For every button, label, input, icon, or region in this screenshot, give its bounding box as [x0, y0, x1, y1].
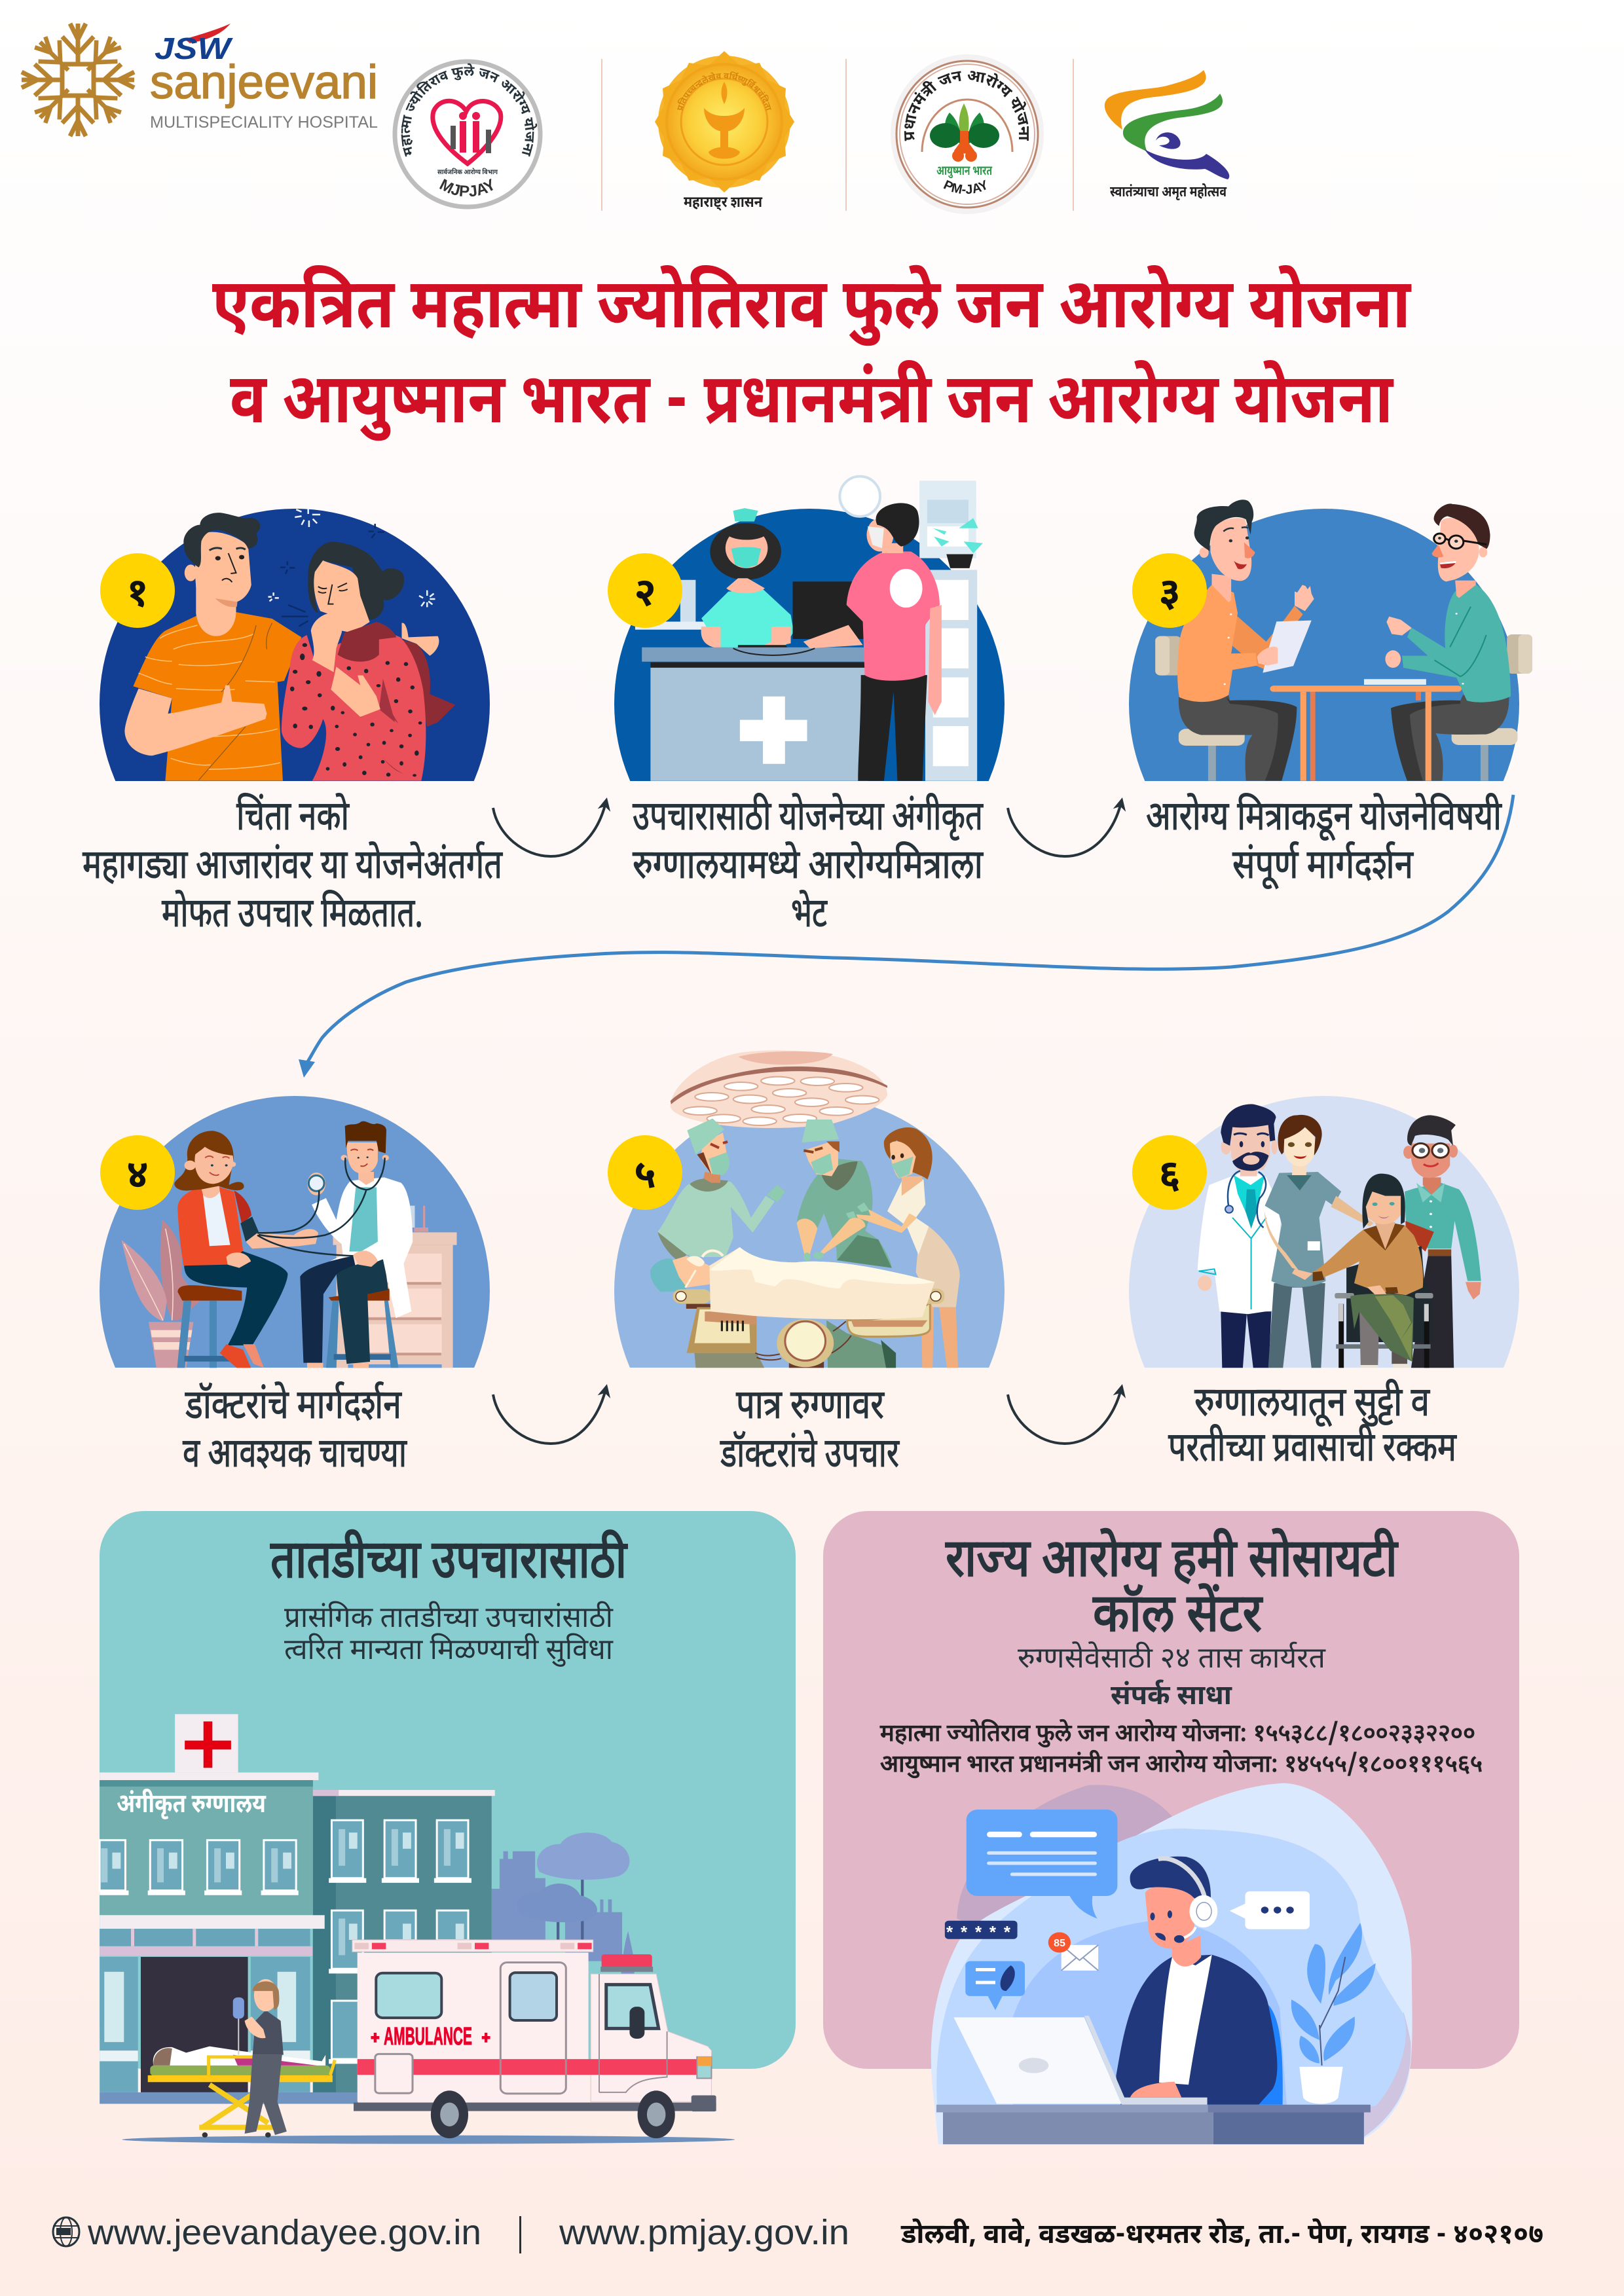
step 1 text: चिंता नको — [236, 793, 350, 847]
title line 1: एकत्रित महात्मा ज्योतिराव फुले जन आरोग्य योजना — [212, 264, 1412, 356]
badge 1 — [100, 553, 175, 628]
badge 4 — [100, 1135, 175, 1210]
arrow: step 5 to 6 — [1008, 1387, 1122, 1444]
badge 1: १ — [126, 571, 149, 622]
arrow: step 2 to 3 — [1008, 800, 1122, 856]
password label: ***** — [946, 1922, 1011, 1942]
panel heading: कॉल सेंटर — [1093, 1584, 1263, 1652]
badge 3 — [1132, 553, 1207, 628]
arrow: step 1 to 2 — [493, 800, 606, 856]
step 4 text — [183, 1381, 407, 1484]
logo: MJPJAY: महात्मा ज्योतिराव फुले जन आरोग्य योजना — [401, 63, 537, 157]
step 3 text: आरोग्य मित्राकडून योजनेविषयी — [1146, 793, 1502, 847]
step 6: discharge illustration — [1129, 1096, 1519, 1368]
footer divider — [519, 2216, 521, 2253]
logo: Maharashtra seal — [655, 51, 794, 192]
24 hour service line: रुग्णसेवेसाठी २४ तास कार्यरत — [1018, 1641, 1326, 1679]
panel: call center — [823, 1511, 1519, 2144]
badge 6 — [1132, 1135, 1207, 1210]
call center agent illustration — [931, 1783, 1412, 2144]
hospital and ambulance illustration — [100, 1714, 735, 2144]
step 2 text — [633, 793, 984, 943]
step 4 text: डॉक्टरांचे मार्गदर्शन — [185, 1381, 402, 1435]
badge 2: २ — [634, 571, 656, 622]
logo: MJPJAY: MJPJAY — [439, 178, 493, 196]
badge 3: ३ — [1158, 571, 1181, 622]
step 2 text: भेट — [791, 890, 828, 943]
panel background pink — [823, 1511, 1519, 2069]
step 1 text — [83, 793, 503, 943]
panel heading — [946, 1529, 1398, 1652]
header logos — [21, 22, 1230, 214]
step 6 text: परतीच्या प्रवासाची रक्कम — [1168, 1424, 1457, 1478]
badge 2 — [608, 553, 682, 628]
panel description: त्वरित मान्यता मिळण्याची सुविधा — [284, 1633, 614, 1671]
logo: Azadi ka Amrit Mahotsav flame — [1105, 70, 1229, 179]
badge 5 — [608, 1135, 682, 1210]
panel: emergency treatment — [100, 1511, 796, 2144]
icon: globe — [53, 2217, 79, 2246]
step 2 text: उपचारासाठी योजनेच्या अंगीकृत — [633, 793, 984, 847]
step 1: illness illustration — [100, 508, 490, 781]
badge 5: ५ — [634, 1153, 656, 1204]
website 1: www.jeevandayee.gov.in — [87, 2213, 481, 2252]
notification count: 85 — [1054, 1938, 1065, 1949]
logo: MJPJAY — [393, 59, 542, 210]
logo: hospital tagline: MULTISPECIALITY HOSPITAL — [150, 113, 378, 132]
step 6 text — [1168, 1379, 1457, 1478]
logo: PM-JAY: प्रधानमंत्री जन आरोग्य योजना — [904, 71, 1029, 141]
badge 6: ६ — [1158, 1153, 1181, 1204]
helpline numbers: महात्मा ज्योतिराव फुले जन आरोग्य योजना: १५५३८८/१८००२३३२२०० — [880, 1719, 1475, 1751]
logo: PM-JAY — [891, 54, 1044, 214]
step 1 text: मोफत उपचार मिळतात. — [162, 890, 423, 943]
panel description — [284, 1601, 614, 1671]
arrow: long connector step 3 to 4 — [299, 795, 1513, 1078]
panel heading: तातडीच्या उपचारासाठी — [270, 1530, 627, 1599]
step 4: doctor consultation illustration — [100, 1096, 490, 1368]
step 2: reception illustration — [614, 475, 1005, 781]
arrow: step 4 to 5 — [493, 1387, 606, 1444]
logo: PM-JAY: PM-JAY — [943, 179, 986, 194]
panel heading: राज्य आरोग्य हमी सोसायटी — [946, 1529, 1398, 1597]
logo caption: Amrit Mahotsav: स्वातंत्र्याचा अमृत महोत्सव — [1110, 183, 1227, 202]
helpline numbers — [880, 1719, 1483, 1781]
title line 2: व आयुष्मान भारत - प्रधानमंत्री जन आरोग्य योजना — [230, 360, 1394, 451]
address: डोलवी, वावे, वडखळ-धरमतर रोड, ता.- पेण, रायगड - ४०२१०७ — [900, 2218, 1543, 2255]
hospital sign: अंगीकृत रुग्णालय — [117, 1789, 266, 1823]
logo: JSW wordmark — [155, 24, 233, 65]
footer — [53, 2213, 1543, 2255]
logo: Maharashtra seal: प्रतिपच्चन्द्रलेखेव वर्धिष्णुर्विश्ववंदिता — [677, 71, 771, 111]
panel description: प्रासंगिक तातडीच्या उपचारांसाठी — [284, 1601, 614, 1639]
website 2: www.pmjay.gov.in — [559, 2213, 849, 2252]
step 5 text: पात्र रुग्णावर — [736, 1382, 885, 1435]
helpline numbers: आयुष्मान भारत प्रधानमंत्री जन आरोग्य योजना: १४५५५/१८००१११५६५ — [880, 1750, 1483, 1781]
logo: MJPJAY: सार्वजनिक आरोग्य विभाग — [437, 168, 498, 177]
title — [212, 264, 1412, 451]
ambulance label: AMBULANCE — [384, 2023, 472, 2050]
step 5 text: डॉक्टरांचे उपचार — [720, 1430, 900, 1484]
step 3 text — [1146, 793, 1502, 895]
contact heading: संपर्क साधा — [1111, 1679, 1232, 1716]
step 3: guidance illustration — [1129, 500, 1532, 781]
step 1 text: महागड्या आजारांवर या योजनेअंतर्गत — [83, 841, 503, 895]
panel background teal — [100, 1511, 796, 2069]
badge 4: ४ — [126, 1153, 149, 1204]
logo: sanjeevani wordmark: sanjeevani — [150, 56, 378, 109]
step 4 text: व आवश्यक चाचण्या — [183, 1430, 407, 1484]
logo caption: Maharashtra government: महाराष्ट्र शासन — [684, 194, 763, 213]
logo: PM-JAY: आयुष्मान भारत — [936, 164, 992, 181]
step 3 text: संपूर्ण मार्गदर्शन — [1232, 841, 1414, 895]
step 2 text: रुग्णालयामध्ये आरोग्यमित्राला — [633, 841, 984, 895]
step 5 text — [720, 1382, 900, 1484]
step 6 text: रुग्णालयातून सुट्टी व — [1194, 1379, 1430, 1432]
logo: JSW wordmark: JSW — [155, 31, 233, 65]
step 5: surgery illustration — [614, 1050, 1005, 1368]
logo: Sanjeevani snowflake — [22, 24, 134, 136]
